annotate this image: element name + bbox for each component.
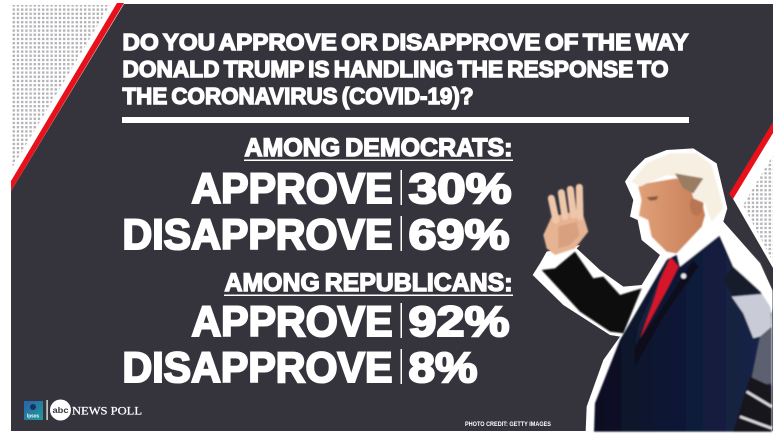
row: disapprove 69%: DISAPPROVE (122, 211, 392, 259)
logo: Ipsos / ABC News Poll (24, 400, 142, 420)
heading underline (244, 160, 513, 161)
grey sleeve (750, 327, 772, 387)
palm shading (558, 222, 579, 248)
row: approve 92%: APPROVE (192, 298, 392, 346)
row: approve 30%: 30% (408, 165, 512, 213)
photo credit: PHOTO CREDIT: GETTY IMAGES (465, 422, 551, 428)
dotted halftone panel: right (743, 155, 773, 262)
heading underline (224, 294, 513, 296)
row: disapprove 8%: 8% (408, 344, 478, 392)
red tie (640, 257, 679, 338)
jacket shoulder shadow (723, 267, 761, 295)
suit body (594, 233, 772, 432)
heading: among Republicans: AMONG REPUBLICANS: (224, 269, 512, 297)
jacket sleeve (542, 252, 642, 333)
section: among Democrats (122, 134, 513, 259)
waving hand (543, 187, 588, 255)
logo divider (46, 400, 48, 420)
title (122, 29, 689, 109)
title: DONALD TRUMP IS HANDLING THE RESPONSE TO (122, 56, 668, 82)
text: News Poll: NEWS POLL (72, 404, 142, 418)
lapel pin (681, 273, 686, 279)
red diagonal stripe right (729, 122, 773, 199)
shoulder highlight (720, 232, 772, 310)
row: disapprove 69%: 69% (408, 211, 510, 259)
figure: Trump waving (533, 148, 772, 432)
icon: Ipsos: Ipsos (27, 414, 39, 420)
red diagonal stripe left (11, 3, 124, 191)
hair (632, 153, 723, 222)
title: THE CORONAVIRUS (COVID-19)? (122, 83, 474, 109)
heading: among Democrats: AMONG DEMOCRATS: (244, 134, 512, 162)
lapel (635, 260, 698, 367)
row: disapprove 8%: DISAPPROVE (122, 344, 392, 392)
row: approve 92% (192, 298, 510, 346)
ear (690, 194, 703, 216)
icon: abc circle: abc (52, 406, 69, 415)
shirt front (635, 258, 677, 350)
dark cuff stripes (733, 377, 772, 432)
shirt collar (677, 227, 720, 267)
row: approve 92%: 92% (408, 298, 510, 346)
section: among Republicans (122, 269, 513, 392)
eye shadow (647, 196, 658, 201)
hair shadow (675, 173, 703, 193)
sleeve sheen (732, 293, 772, 338)
neck and face (638, 178, 705, 253)
title: DO YOU APPROVE OR DISAPPROVE OF THE WAY (122, 29, 689, 55)
figure white outline (533, 148, 772, 432)
row: approve 30% (192, 165, 512, 213)
dotted halftone panel: top left (12, 5, 110, 168)
row: approve 30%: APPROVE (192, 165, 392, 213)
title rule (122, 117, 689, 123)
